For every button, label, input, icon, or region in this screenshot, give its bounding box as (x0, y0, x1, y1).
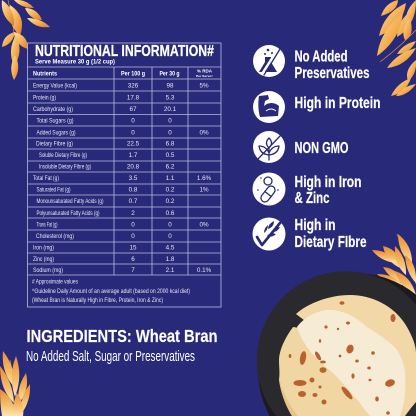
row: total sugars: 0 (131, 118, 135, 124)
photo: plate of rotis (257, 271, 416, 416)
plate well (257, 271, 416, 416)
row: added sugars: 0 (131, 130, 135, 136)
row: saturated fat (36, 186, 209, 194)
row: total sugars (36, 118, 172, 124)
row: sodium: 7 (131, 267, 135, 274)
panel: nutrition table (28, 43, 221, 307)
row: total fat (33, 175, 212, 182)
row: zinc: 1.8 (166, 256, 175, 263)
row: added sugars: 0 (168, 130, 172, 136)
row: total sugars: 0 (168, 118, 172, 124)
table grid (28, 67, 221, 275)
ingredients heading: INGREDIENTS: Wheat Bran (26, 326, 218, 346)
benefit: non gmo (253, 131, 348, 163)
row: sodium (33, 267, 212, 274)
row: monounsaturated: Monounsaturated Fatty Acids (g) (36, 198, 104, 205)
row: trans fat: 0% (199, 222, 209, 228)
row: dietary fibre: 22.5 (127, 140, 140, 148)
table header: Per 100 g (121, 70, 145, 78)
lower roti (279, 327, 372, 416)
row: cholesterol: Cholesterol (mg) (36, 233, 74, 240)
row: total sugars: Total Sugars (g) (36, 118, 74, 124)
row: energy: 326 (128, 82, 139, 90)
label line 2: Dietary FIbre (294, 234, 367, 251)
row: protein: 17.8 (127, 94, 140, 102)
row: soluble fibre: Soluble Dietary Fibre (g) (39, 152, 87, 159)
wheat sprig: bottom left (0, 351, 30, 416)
footnotes (32, 278, 190, 304)
row: cholesterol: 0 (168, 233, 172, 240)
plate (258, 273, 416, 416)
back roti (296, 295, 416, 416)
row: insoluble fibre: 6.2 (166, 164, 175, 170)
row: soluble fibre: 1.7 (129, 152, 138, 159)
label: High in (294, 217, 336, 234)
row: dietary fibre (36, 140, 175, 148)
row: trans fat (36, 222, 209, 228)
row: insoluble fibre: 20.8 (127, 164, 140, 170)
footnotes: ^Guideline Daily Amount of an average adult (based on 2000 kcal diet) (32, 288, 190, 295)
row: sodium: 2.1 (166, 267, 175, 274)
table header: Per Serve^ (196, 74, 213, 78)
footnotes: (Wheat Bran is Naturally High in Fibre, Protein, Iron & Zinc) (32, 297, 163, 304)
row: energy: 5% (199, 82, 209, 90)
row: soluble fibre: 0.5 (166, 152, 175, 159)
table header: % RDA (197, 68, 213, 74)
row: carbohydrate (33, 106, 177, 113)
row: energy: 98 (166, 82, 174, 90)
icon: crossed leaves (253, 131, 285, 163)
row: total fat: 1.6% (197, 175, 212, 182)
row: iron: 15 (129, 244, 137, 252)
heading: NUTRITIONAL INFORMATION# (35, 43, 214, 60)
row: iron: Iron (mg) (33, 244, 54, 252)
row: soluble fibre (39, 152, 175, 159)
icon: flexed arm (253, 91, 285, 123)
row: cholesterol (36, 233, 172, 240)
row: monounsaturated: 0.2 (166, 198, 175, 205)
row: trans fat: Trans Fat (g) (36, 222, 58, 228)
row: total fat: 1.1 (166, 175, 175, 182)
row: saturated fat: 0.2 (166, 186, 175, 194)
row: trans fat: 0 (131, 222, 135, 228)
footnotes: # Approximate values (32, 278, 79, 286)
row: polyunsaturated: 0.6 (166, 210, 175, 217)
row: cholesterol: 0 (131, 233, 135, 240)
label line 2: & Zinc (294, 190, 330, 207)
icon: flask (253, 45, 285, 77)
label: High in Protein (294, 95, 380, 112)
benefit: high in iron and zinc (252, 172, 362, 207)
row: zinc: 6 (131, 256, 135, 263)
label: High in Iron (294, 174, 362, 191)
row: iron (33, 244, 175, 252)
row: sodium: Sodium (mg) (33, 267, 63, 274)
row: insoluble fibre: Insoluble Dietary Fibre (g) (39, 164, 91, 170)
benefit: high in protein (253, 91, 380, 123)
row: energy (33, 82, 209, 90)
row: carbohydrate: Carbohydrate (g) (33, 106, 73, 113)
row: zinc (33, 256, 175, 263)
row: insoluble fibre (39, 164, 175, 170)
row: carbohydrate: 20.1 (164, 106, 177, 113)
row: monounsaturated: 0.7 (129, 198, 138, 205)
label: No Added (294, 48, 348, 66)
row: added sugars: Added Sugars (g) (36, 130, 76, 136)
row: iron: 4.5 (166, 244, 175, 252)
table header: Nutrients (33, 70, 57, 78)
row: added sugars: 0% (199, 130, 209, 136)
row: protein (33, 94, 175, 102)
row: monounsaturated (36, 198, 175, 205)
row: total fat: 3.5 (129, 175, 138, 182)
row: added sugars (36, 130, 209, 136)
row: polyunsaturated: Polyunsaturated Fatty Acids (g) (36, 210, 100, 217)
icon: wheat with check (252, 218, 286, 250)
row: carbohydrate: 67 (129, 106, 137, 113)
row: zinc: Zinc (mg) (33, 256, 54, 263)
front folded roti (297, 310, 405, 416)
ingredients note: No Added Salt, Sugar or Preservatives (26, 349, 195, 365)
row: protein: 5.3 (166, 94, 175, 102)
table frame (28, 43, 221, 307)
row: polyunsaturated (36, 210, 175, 217)
row: protein: Protein (g) (33, 94, 56, 102)
wheat sprig: top left (2, 0, 50, 80)
row: trans fat: 0 (168, 222, 172, 228)
row: dietary fibre: Dietary Fibre (g) (36, 140, 73, 148)
benefit: high in dietary fibre (252, 217, 367, 251)
row: saturated fat: Saturated Fat (g) (36, 186, 70, 194)
icon: capsule (252, 172, 286, 206)
row: saturated fat: 0.8 (129, 186, 138, 194)
wheat sprig: top right (377, 0, 416, 96)
table header: Per 30 g (160, 70, 180, 78)
label: NON GMO (294, 140, 348, 157)
row: energy: Energy Value (kcal) (33, 82, 77, 90)
row: polyunsaturated: 2 (131, 210, 135, 217)
serve measure: Serve Measure 30 g (1/2 cup) (35, 58, 115, 66)
row: saturated fat: 1% (199, 186, 209, 194)
row: sodium: 0.1% (197, 267, 212, 274)
row: dietary fibre: 6.8 (166, 140, 175, 148)
label line 2: Preservatives (294, 65, 370, 82)
toast spots (289, 301, 396, 415)
benefit: no added preservatives (253, 45, 370, 82)
lower roti underside (279, 378, 298, 416)
wheat sprig: right, above plate (372, 234, 416, 295)
row: total fat: Total Fat (g) (33, 175, 59, 182)
table header (33, 68, 213, 78)
